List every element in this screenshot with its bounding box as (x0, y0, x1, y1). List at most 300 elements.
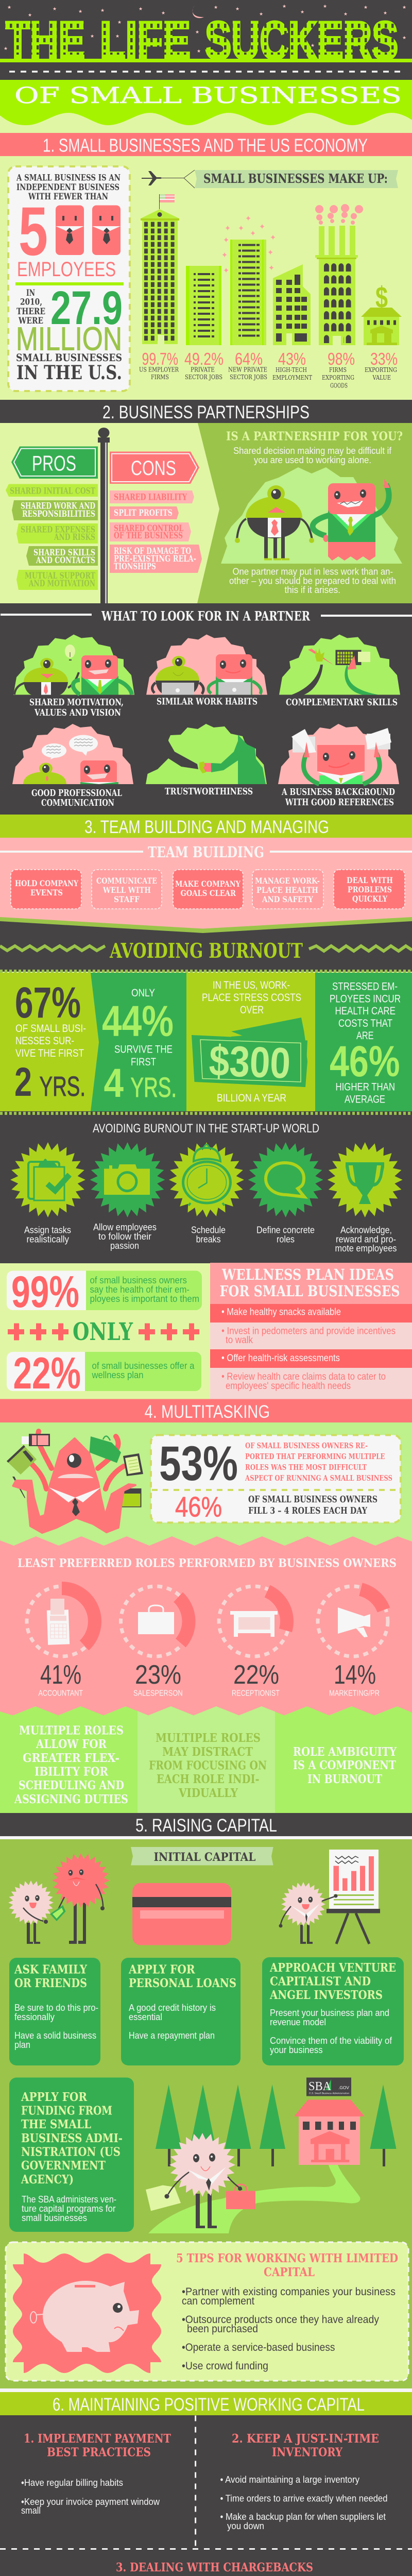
stat: stress costs: OVER (240, 1004, 264, 1016)
chart labels: percent shares: 43% (278, 350, 306, 369)
text: flexibility: GREATER FLEX- (23, 1751, 119, 1765)
stat: 27.9 million (16, 282, 123, 384)
card: venture capitalists (262, 1957, 404, 2065)
stat: 27.9 million: 2010, (20, 297, 42, 308)
card: hold company events: EVENTS (30, 888, 63, 897)
stat: 44 percent: FIRST (131, 1056, 156, 1068)
stat: 46 percent: COSTS THAT (338, 1018, 392, 1029)
card: 22 percent: of small businesses offer a (92, 1361, 195, 1371)
icon: stars: ★★★★★★★★★★★★★★★★★★★★★★★★★ (4, 4, 406, 54)
chart labels: percent shares: 64% (235, 350, 263, 369)
icon: megaphone (338, 1607, 370, 1637)
heading: avoiding burnout (0, 939, 412, 963)
stat: stress costs: PLACE STRESS COSTS (202, 992, 301, 1004)
list: tips: •Partner with existing companies your business (182, 2286, 396, 2298)
building: high-tech (273, 264, 311, 345)
card: role statistics: 53% (159, 1436, 238, 1491)
card: 5 tips: CAPITAL (264, 2265, 315, 2279)
building: factory exports (315, 204, 363, 345)
list: cons: PRE-EXISTING RELA- (114, 554, 196, 564)
stat: stress costs: IN THE US, WORK- (213, 979, 290, 991)
heading: section 6 (0, 2388, 412, 2415)
chart labels: percent shares: 49.2% (184, 350, 224, 369)
panel: wellness plan ideas (210, 1263, 412, 1399)
panel: is a partnership for you (197, 423, 412, 603)
card: role statistics (151, 1435, 401, 1523)
card: SBA funding: AGENCY) (21, 2173, 74, 2187)
text: caution: other – you should be prepared to deal with (229, 575, 396, 586)
chart: accountant 41 percent (27, 1586, 97, 1698)
card: ask family: Have a solid business (14, 2030, 96, 2041)
text: intro: Shared decision making may be difficult if (233, 446, 392, 456)
text: distraction: FROM FOCUSING ON (149, 1759, 267, 1773)
captions: reward and pro- (336, 1234, 396, 1245)
card: role statistics: OF SMALL BUSINESS OWNERS RE- (245, 1441, 368, 1450)
text: distraction: MAY DISTRACT (162, 1745, 253, 1759)
chart labels: percent shares: VALUE (372, 374, 391, 381)
text: definition: INDEPENDENT BUSINESS (16, 182, 119, 193)
text: intro: you are used to working alone. (254, 455, 371, 465)
card: deal with problems: DEAL WITH (347, 875, 393, 885)
stat: 500 employees (17, 193, 121, 281)
icon: credit card (132, 1883, 231, 1945)
card: complementary skills (279, 635, 400, 695)
captions: Define concrete (256, 1225, 315, 1235)
chart: receptionist 22 percent (219, 1586, 289, 1698)
stat: 27.9 million: MILLION (16, 320, 122, 358)
caption: COMMUNICATION (41, 798, 114, 808)
building: new private sector jobs: ✦✦✦✦✦✦✦✦✦✦✦ (221, 214, 276, 275)
card: communicate well: COMMUNICATE (96, 876, 157, 886)
panel: raising capital (0, 1839, 412, 2388)
icon: octopus manager (7, 1431, 143, 1533)
caption (31, 788, 122, 808)
list: ideas: to walk (226, 1335, 253, 1346)
card: SBA funding (9, 2077, 134, 2232)
captions: Schedule (191, 1225, 226, 1235)
card: personal loans: Have a repayment plan (129, 2030, 215, 2041)
chart labels: percent shares: EMPLOYMENT (272, 374, 312, 381)
heading: section 4 (0, 1399, 412, 1422)
sign: pros (11, 446, 98, 479)
list: cons: OF THE BUSINESS (114, 531, 183, 541)
stat: 67 percent: 2 (14, 1059, 32, 1105)
card: communicate well: WELL WITH (102, 885, 151, 895)
chart labels: percent shares: US EMPLOYER (139, 366, 179, 373)
list: pros: AND RISKS (54, 532, 95, 543)
panel: health statistics (7, 1267, 202, 1398)
chart labels: percent shares (139, 350, 398, 389)
heading: section 2: 2. BUSINESS PARTNERSHIPS (102, 402, 310, 422)
icon: moon (193, 6, 204, 18)
heading: section 4: 4. MULTITASKING (145, 1402, 270, 1422)
sign: cons: CONS (131, 457, 176, 480)
stat: 46 percent: STRESSED EM- (332, 980, 398, 992)
stat: 44 percent: 4 (104, 1060, 124, 1106)
text: distraction: VIDUALLY (178, 1786, 238, 1800)
panel: small business definition card (8, 166, 130, 391)
card: venture capitalists: CAPITALIST AND (270, 1975, 371, 1989)
chart: marketing 14 percent (318, 1586, 388, 1698)
card: personal loans: essential (129, 2012, 162, 2022)
card: ask family (9, 1958, 100, 2065)
list: ideas: • Offer health-risk assessments (221, 1353, 340, 1364)
chart: receptionist 22 percent: RECEPTIONIST (232, 1689, 280, 1698)
panel: what to look for in a partner (0, 603, 412, 815)
building: bank exporting value: $ (375, 281, 388, 314)
list: tips: •Use crowd funding (182, 2360, 268, 2372)
list: pros: SHARED INITIAL COST (10, 486, 95, 496)
list: cons: SHARED CONTROL (114, 523, 183, 534)
card: SBA funding: FUNDING FROM (21, 2104, 112, 2117)
chart labels: percent shares: FIRMS (151, 374, 169, 381)
text: tip 2: • Make a backup plan for when suppliers let (220, 2512, 386, 2522)
list: ideas: • Review health care claims data to cater to (221, 1371, 386, 1382)
stat: 44 percent: YRS. (131, 1072, 177, 1103)
icon: banknotes: $300 (208, 1036, 291, 1088)
icon: laptops (162, 682, 251, 695)
card: deal with problems (334, 870, 405, 909)
chart labels: percent shares: GOODS (330, 382, 348, 389)
stat: stress costs (192, 979, 307, 1104)
heading: section 2 (0, 400, 412, 423)
card: goals clear: MAKE COMPANY (175, 879, 241, 889)
card: ask family: OR FRIENDS (14, 1976, 87, 1990)
list: cons: SHARED LIABILITY (114, 493, 187, 503)
card: goals clear (173, 870, 243, 909)
stat: 67 percent: YRS. (39, 1071, 85, 1102)
list: cons: TIONSHIPS (114, 562, 156, 572)
card: trustworthiness handshake (144, 721, 267, 784)
card: 22 percent (7, 1349, 201, 1398)
card: personal loans: A good credit history is (129, 2003, 216, 2013)
building: private sector jobs (186, 266, 221, 345)
stat: 44 percent (102, 987, 177, 1106)
card: venture capitalists: revenue model (270, 2017, 326, 2027)
card: 99 percent: 99% (11, 1267, 79, 1317)
chart: salesperson 23 percent: SALESPERSON (133, 1689, 183, 1698)
list: pros: RESPONSIBILITIES (22, 509, 95, 519)
chart: receptionist 22 percent: 22% (233, 1660, 279, 1690)
list: pros: SHARED EXPENSES (21, 524, 95, 535)
text: tip 1: 1. IMPLEMENT PAYMENT (24, 2432, 171, 2446)
card: 99 percent: ployees is important to them (90, 1294, 199, 1304)
text: ambiguity (293, 1745, 397, 1786)
panel: multiple roles notes (0, 1706, 412, 1813)
heading: section 5 (0, 1813, 412, 1839)
list: pros: AND MOTIVATION (28, 579, 95, 589)
panel: avoiding burnout in the start-up world: AVOIDING BURNOUT IN THE START-UP WORLD (93, 1122, 319, 1136)
text: tip 2: you down (227, 2521, 264, 2531)
heading: avoiding burnout: AVOIDING BURNOUT (109, 939, 303, 963)
card: ask family: fessionally (14, 2012, 55, 2022)
card: ask family: ASK FAMILY (14, 1963, 87, 1977)
text: tip 1: small (21, 2505, 41, 2516)
card: communicate well (92, 870, 162, 909)
stat: 46 percent: HEALTH CARE (335, 1005, 396, 1017)
title: THE (6, 11, 85, 70)
card: deal with problems: QUICKLY (352, 894, 387, 904)
captions: Acknowledge, (340, 1225, 392, 1235)
captions: realistically (27, 1234, 69, 1245)
chart labels: percent shares: SECTOR JOBS (230, 374, 267, 381)
character: olive partner (235, 485, 314, 561)
text: flexibility: SCHEDULING AND (19, 1778, 124, 1792)
title: LIFE (100, 11, 191, 70)
card: personal loans (121, 1958, 241, 2065)
stat: 27.9 million: SMALL BUSINESSES (16, 351, 122, 364)
card: SBA funding: BUSINESS ADMI- (21, 2131, 123, 2145)
caption: SIMILAR WORK HABITS (157, 697, 258, 707)
card: venture capitalists: ANGEL INVESTORS (269, 1988, 383, 2002)
card: health and safety: PLACE HEALTH (256, 885, 318, 895)
icon: pen and hand (308, 648, 334, 665)
text: definition: WITH FEWER THAN (28, 192, 108, 202)
list: pros: SHARED SKILLS (33, 548, 95, 558)
badge: schedule breaks (169, 1142, 244, 1217)
sign: SBA logo: U.S. Small Business Administration (309, 2093, 350, 2095)
stat: 500 employees: 5 (19, 193, 48, 270)
stat: 46 percent: HIGHER THAN (336, 1081, 395, 1093)
list: tips: •Outsource products once they have already (182, 2314, 379, 2326)
list: tips: can complement (182, 2295, 254, 2307)
list: pros: SHARED WORK AND (21, 501, 95, 512)
chart: salesperson 23 percent: 23% (135, 1660, 181, 1690)
card: business background (278, 724, 399, 784)
sign: SBA logo: SBA (308, 2080, 332, 2093)
card: role statistics: OF SMALL BUSINESS OWNERS (248, 1494, 377, 1505)
building: new private sector jobs (221, 214, 276, 345)
card: health and safety: MANAGE WORK- (255, 876, 320, 886)
card: goals clear: GOALS CLEAR (180, 888, 236, 898)
panel: burnout statistics (0, 971, 412, 1111)
card: SBA funding: THE SMALL (21, 2117, 91, 2131)
text: only with plus signs (8, 1318, 199, 1346)
card: personal loans: APPLY FOR (128, 1963, 195, 1977)
badge: assign tasks (10, 1142, 85, 1217)
icon: speech bubbles (42, 735, 98, 759)
icon: presenter with chart (279, 1850, 380, 1944)
text: flexibility: ASSIGNING DUTIES (14, 1792, 128, 1806)
badge: reward employees (328, 1142, 403, 1217)
chart: accountant 41 percent: 41% (40, 1660, 81, 1690)
stat: 67 percent: OF SMALL BUSI- (15, 1023, 86, 1035)
chart: salesperson 23 percent (121, 1586, 191, 1698)
icon: light bulb (65, 645, 75, 660)
heading: section 3 (0, 815, 412, 838)
caption (29, 697, 124, 718)
text: intro (233, 446, 392, 465)
text: definition: A SMALL BUSINESS IS AN (16, 173, 121, 183)
caption: TRUSTWORTHINESS (165, 786, 253, 797)
text: caution: One partner may put in less work than an- (233, 567, 393, 577)
stat: 46 percent (330, 980, 401, 1106)
list: tips: been purchased (187, 2323, 258, 2335)
captions: breaks (196, 1234, 221, 1245)
text: ambiguity: IN BURNOUT (307, 1772, 382, 1786)
panel: least preferred roles (18, 1557, 397, 1698)
card: SBA funding: small businesses (22, 2213, 87, 2223)
text: flexibility (14, 1723, 128, 1806)
list: pros (6, 484, 98, 590)
card: shared motivation (13, 635, 134, 695)
banner: initial capital (131, 1847, 273, 1865)
card: health and safety: AND SAFETY (262, 894, 313, 904)
heading: section 5: 5. RAISING CAPITAL (135, 1816, 277, 1836)
list: ideas: • Make healthy snacks available (221, 1307, 341, 1318)
text: flexibility: IBILITY FOR (35, 1765, 109, 1779)
chart: skyline of buildings (141, 194, 402, 345)
stat: 46 percent: ARE (356, 1030, 374, 1042)
stat: 46 percent: AVERAGE (345, 1094, 385, 1106)
icon: signpost (98, 428, 110, 603)
character: coral partner (313, 479, 390, 561)
list: ideas: employees' specific health needs (226, 1381, 351, 1392)
list: tips (182, 2286, 396, 2372)
caption (281, 787, 395, 808)
card: 22 percent: wellness plan (92, 1370, 143, 1380)
captions: Allow employees (93, 1222, 157, 1232)
caption: GOOD PROFESSIONAL (31, 788, 122, 799)
stat: 67 percent (14, 978, 86, 1105)
icon: plane with banner (142, 170, 398, 188)
caption: VALUES AND VISION (34, 707, 121, 718)
card: good professional communication (12, 724, 133, 784)
caption: SHARED MOTIVATION, (29, 697, 124, 708)
icon: banknotes (192, 1018, 307, 1088)
stat: 44 percent: 44% (102, 997, 174, 1045)
text: tip 2: 2. KEEP A JUST-IN-TIME (232, 2432, 379, 2446)
text: distraction: EACH ROLE INDI- (157, 1772, 260, 1786)
icon: desk (230, 1611, 278, 1637)
text: tip 1 (21, 2432, 171, 2516)
captions: passion (110, 1241, 139, 1251)
captions: Assign tasks (24, 1225, 71, 1235)
card: health and safety (252, 870, 323, 909)
badge: define roles (248, 1142, 323, 1217)
icon: bag (138, 1605, 174, 1634)
stat: 27.9 million: IN THE U.S. (16, 361, 122, 384)
card: SBA funding: The SBA administers ven- (22, 2194, 116, 2205)
list: tips: •Operate a service-based business (182, 2342, 335, 2353)
text: tip 2 (220, 2432, 387, 2531)
card: 5 tips (6, 2242, 408, 2381)
card: role statistics: ROLES WAS THE MOST DIFFICULT (245, 1463, 367, 1472)
sign: pros: PROS (32, 451, 76, 476)
chart labels: percent shares: SECTOR JOBS (185, 374, 222, 381)
text: flexibility: MULTIPLE ROLES (19, 1723, 124, 1737)
sign: SBA logo: .GOV (338, 2086, 350, 2090)
chart labels: percent shares: EXPORTING (365, 366, 397, 374)
text: tip 2: INVENTORY (272, 2446, 342, 2460)
icon: SBA building (294, 2100, 365, 2165)
stat: 27.9 million: THERE (16, 307, 45, 317)
character: pink founder (146, 2133, 255, 2228)
stat: 27.9 million: 27.9 (50, 282, 123, 334)
text: tip 1: •Have regular billing habits (21, 2478, 123, 2488)
text: tip 1: •Keep your invoice payment window (21, 2497, 160, 2507)
captions: to follow their (98, 1231, 151, 1242)
captions: roles (277, 1234, 295, 1245)
icon: calculator (47, 1599, 70, 1645)
stat: 27.9 million: WERE (18, 316, 43, 326)
chart labels: percent shares: HIGH-TECH (276, 366, 307, 374)
panel: header (0, 0, 412, 125)
text: distraction: MULTIPLE ROLES (156, 1731, 261, 1745)
text: tip 1: BEST PRACTICES (47, 2446, 151, 2460)
chart labels: percent shares: 98% (328, 350, 355, 369)
text: flexibility: ALLOW FOR (36, 1737, 107, 1751)
sign: cons (110, 451, 199, 484)
stat: 500 employees: EMPLOYEES (17, 258, 116, 281)
chart labels: percent shares: 99.7% (142, 350, 178, 369)
stat: stress costs: BILLION A YEAR (217, 1092, 286, 1104)
captions (24, 1222, 397, 1253)
stat: 67 percent: 67% (15, 978, 81, 1027)
chart labels: percent shares: NEW PRIVATE (228, 366, 267, 373)
list: pros: AND CONTACTS (36, 555, 95, 566)
title (6, 11, 398, 70)
card: SBA funding: GOVERNMENT (21, 2159, 106, 2173)
text: caution (229, 567, 396, 595)
text: tip 2: • Avoid maintaining a large inventory (220, 2475, 359, 2485)
stat: 67 percent: NESSES SUR- (15, 1035, 74, 1047)
icon: piggy bank (13, 2253, 161, 2373)
panel: team building (0, 838, 412, 972)
stat: 27.9 million: IN (26, 288, 35, 298)
card: SBA funding: APPLY FOR (21, 2090, 88, 2104)
text: definition (16, 173, 121, 202)
card: personal loans: PERSONAL LOANS (129, 1976, 236, 1990)
card: communicate well: STAFF (114, 894, 140, 904)
stat: 44 percent: ONLY (131, 987, 155, 999)
panel: working capital tips (0, 2415, 412, 2576)
text: caution: this if it arises. (284, 585, 340, 595)
chart labels: percent shares: PRIVATE (191, 366, 215, 373)
card: venture capitalists: Present your business plan and (270, 2008, 389, 2018)
text: tip 2: • Time orders to arrive exactly when needed (220, 2494, 387, 2504)
icon: lenders illustration (8, 1853, 110, 1944)
stat: 67 percent: VIVE THE FIRST (15, 1047, 84, 1059)
card: hold company events: HOLD COMPANY (15, 878, 78, 888)
badge: follow passion (90, 1142, 165, 1217)
icon: partners illustration (221, 467, 402, 564)
card: hold company events (11, 870, 81, 909)
chart: marketing 14 percent: MARKETING/PR (329, 1689, 380, 1698)
icon: road to SBA with trees (146, 2077, 397, 2233)
card: role statistics: 46% (175, 1491, 222, 1523)
chart labels: percent shares: 33% (370, 350, 398, 369)
card: venture capitalists: your business (270, 2045, 322, 2055)
card: 22 percent: 22% (13, 1349, 81, 1398)
panel: team building: TEAM BUILDING (148, 843, 264, 861)
building: bank exporting value (361, 281, 402, 345)
list: cons (110, 490, 202, 573)
card: 99 percent (7, 1267, 202, 1317)
chart labels: percent shares: EXPORTING (322, 374, 354, 381)
list: cons: SPLIT PROFITS (114, 508, 173, 518)
card: role statistics: FILL 3 – 4 ROLES EACH DAY (248, 1505, 368, 1516)
card: venture capitalists: Convince them of the viability of (270, 2036, 392, 2046)
heading: dealing with chargebacks: 3. DEALING WITH CHARGEBACKS (116, 2561, 313, 2574)
subtitle: OF SMALL BUSINESSES (14, 83, 402, 109)
chart: accountant 41 percent: ACCOUNTANT (38, 1689, 83, 1698)
list: ideas (221, 1307, 396, 1392)
card: SBA funding: NISTRATION (US (21, 2145, 121, 2159)
heading: section 3: 3. TEAM BUILDING AND MANAGING (84, 817, 329, 837)
chart: marketing 14 percent: 14% (334, 1660, 376, 1690)
card: similar work habits (146, 635, 267, 695)
